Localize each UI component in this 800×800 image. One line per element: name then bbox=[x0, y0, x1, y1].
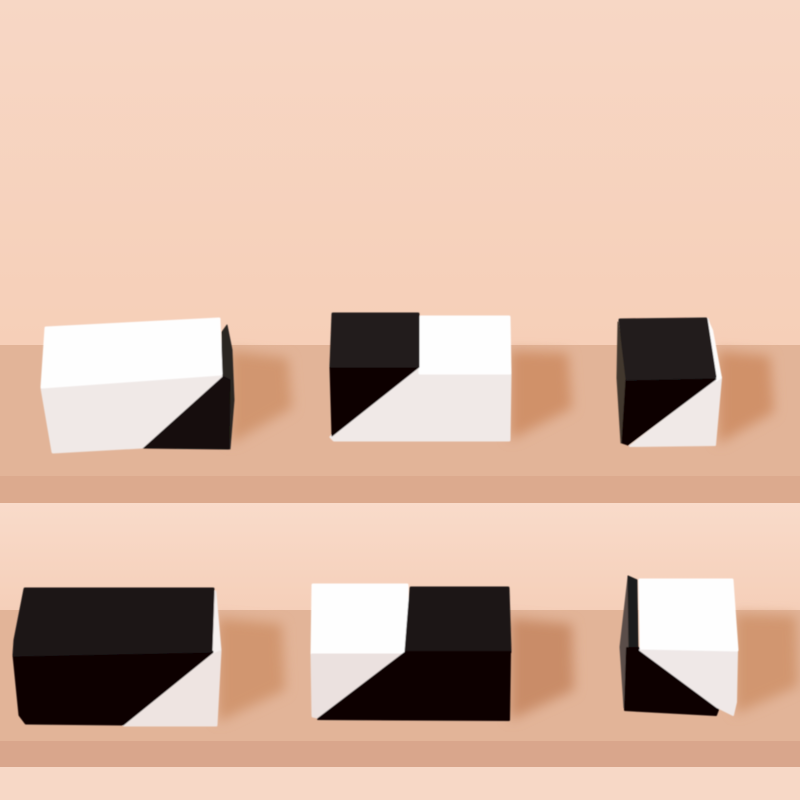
block 5: white and black block bbox=[312, 585, 510, 720]
shadow: block 3 bbox=[718, 351, 774, 444]
shelf: lower front edge bbox=[0, 741, 800, 767]
block 1: white with black corner bbox=[42, 319, 234, 452]
block 6: white block with black base bbox=[620, 576, 737, 715]
shadow: block 1 bbox=[230, 351, 292, 444]
shelf: lower top surface bbox=[0, 610, 800, 741]
block 2: black and white bbox=[330, 314, 510, 440]
shadow: block 2 bbox=[510, 351, 572, 440]
block 4: large black block with white corner bbox=[14, 589, 221, 725]
wall: bottom strip bbox=[0, 767, 800, 800]
wall: upper background bbox=[0, 0, 800, 345]
shelf: upper top surface bbox=[0, 345, 800, 476]
block 3: black cube with white corner bbox=[617, 319, 722, 446]
shelf: upper front edge bbox=[0, 476, 800, 503]
shadow: block 6 bbox=[735, 614, 798, 714]
wall: lower background bbox=[0, 503, 800, 610]
shadow: block 5 bbox=[510, 618, 574, 720]
shadow: block 4 bbox=[218, 618, 285, 722]
